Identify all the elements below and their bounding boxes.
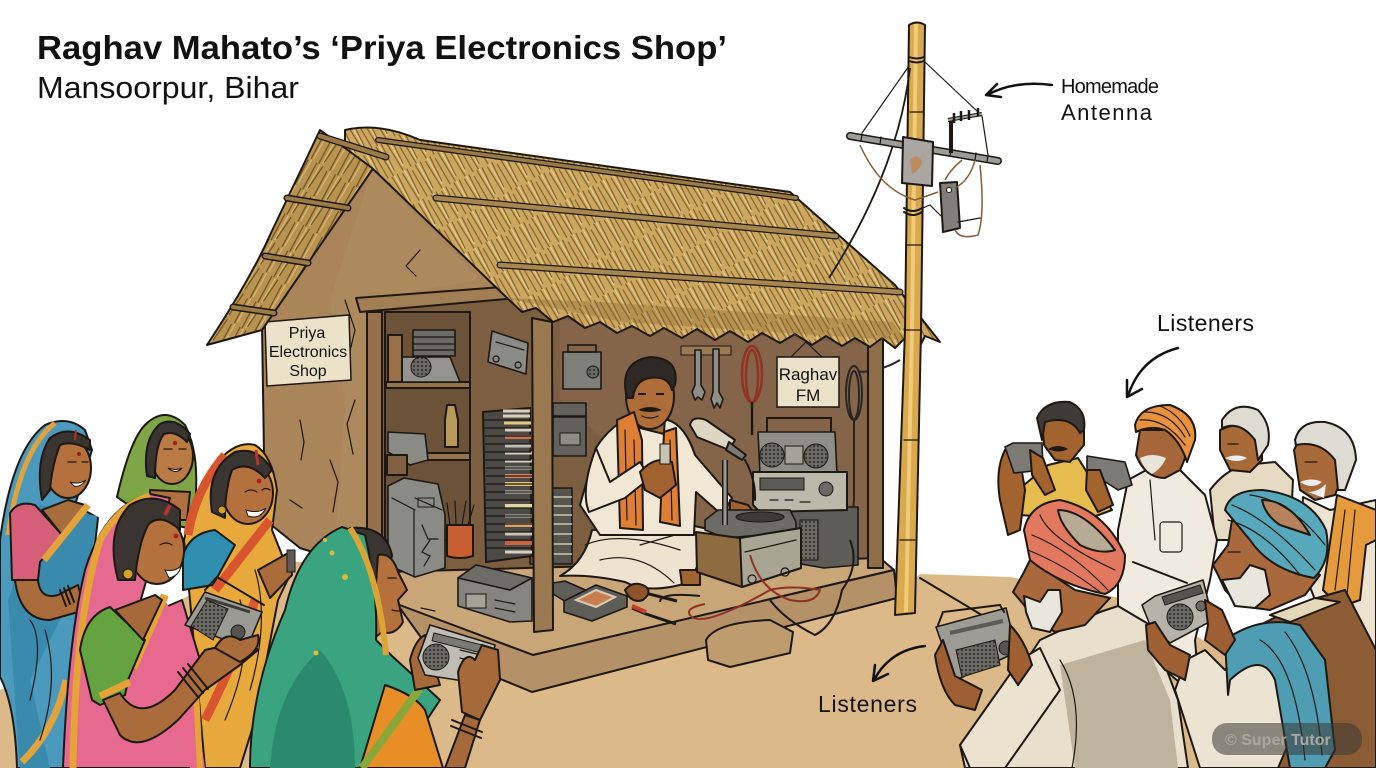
- shelf unit: [385, 312, 470, 540]
- yagi antenna element: [948, 108, 988, 155]
- watermark: [1212, 723, 1362, 755]
- shop sign: Priya Electronics Shop: [265, 315, 351, 386]
- women listeners group: [0, 415, 500, 768]
- face: [372, 555, 407, 640]
- sign: Raghav FM: FM: [796, 386, 820, 405]
- shelf radio: [401, 357, 460, 382]
- main cassette stack: [483, 408, 532, 562]
- hair behind veil: [350, 528, 392, 590]
- men listeners group: [920, 402, 1376, 768]
- face in profile: [1013, 560, 1110, 632]
- front man in blue turban, brown vest: [1133, 490, 1376, 768]
- platform top: [385, 558, 894, 655]
- cassette deck on floor: [458, 565, 532, 622]
- small control box: [940, 182, 960, 232]
- arm with bangles: [103, 640, 258, 742]
- right hand on the deck: [730, 500, 760, 522]
- wooden box amplifier: [696, 528, 801, 587]
- beard: [1024, 590, 1062, 632]
- shop sign: Priya Electronics Shop: Shop: [289, 363, 327, 380]
- label: Homemade Antenna: Homemade: [1061, 76, 1159, 98]
- wall radios: [488, 331, 601, 456]
- dhoti: [560, 525, 735, 588]
- watermark: © Super Tutor: [1225, 732, 1331, 749]
- bamboo pole with homemade antenna: [829, 22, 998, 615]
- floor tools and tapes: [421, 581, 677, 624]
- arrow to men listeners: [1127, 348, 1178, 397]
- label: Homemade Antenna: [1061, 76, 1159, 125]
- roof bamboo battens: [233, 136, 900, 313]
- white sleeve: [1175, 640, 1290, 768]
- radio: [1133, 562, 1213, 643]
- radio equipment stack: [660, 418, 858, 635]
- label: Listeners (upper): Listeners: [1157, 310, 1254, 336]
- pencil cup: [447, 501, 474, 558]
- mud wall: [262, 160, 510, 575]
- junction box: [902, 137, 933, 186]
- front thatch roof: [345, 128, 940, 350]
- man with scarf, far right: [1294, 422, 1376, 690]
- blue shawl: [1225, 622, 1335, 768]
- hanging tools: [681, 346, 731, 408]
- platform front: [397, 570, 897, 692]
- turntable mixer: [705, 510, 796, 538]
- hanging red coil: [742, 346, 762, 435]
- neck and head: [634, 410, 665, 434]
- black cable coil: [846, 360, 900, 522]
- back cassette stack: [530, 488, 572, 564]
- radio: [920, 578, 1017, 680]
- title: Raghav Mahato’s ‘Priya Electronics Shop’: [37, 29, 727, 66]
- woman 3: orange sari: [183, 444, 295, 768]
- face in profile: [1213, 520, 1320, 610]
- front man in coral turban: [920, 500, 1188, 768]
- cables: [689, 555, 820, 619]
- label: Listeners (lower): Listeners: [818, 691, 917, 717]
- arrow to shop floor listeners: [873, 646, 925, 681]
- kurta: [580, 413, 732, 535]
- receiver: [753, 472, 847, 512]
- arrow to antenna: [986, 84, 1052, 97]
- radio: [418, 625, 495, 684]
- speaker box: [778, 507, 858, 568]
- sandy ground: [0, 560, 1240, 768]
- man in orange turban, white kurta: [1118, 405, 1217, 700]
- broken device: [388, 432, 428, 465]
- woman 2: green veil: [117, 415, 197, 530]
- center post: [532, 318, 553, 632]
- sign: Raghav FM: Raghav: [779, 365, 838, 384]
- wall posts: [367, 312, 382, 560]
- subtitle: Mansoorpur, Bihar: [37, 70, 299, 105]
- woman 1: blue sari: [0, 421, 98, 768]
- boombox: [767, 418, 831, 431]
- radio: [185, 577, 264, 648]
- man with grey hair: [1210, 407, 1293, 540]
- shop interior: [370, 292, 880, 580]
- hut: [207, 128, 940, 692]
- loose stone: [706, 620, 793, 667]
- arm holding mic: [586, 448, 650, 512]
- sign: Raghav FM: [777, 342, 839, 407]
- gable thatch: [207, 130, 385, 345]
- jug and bottle: [388, 335, 402, 382]
- cross bar: [850, 136, 998, 161]
- label: Homemade Antenna: Antenna: [1061, 100, 1153, 125]
- guy wires: [862, 62, 978, 133]
- Raghav, the presenter: [560, 357, 760, 601]
- young man in yellow shirt: [998, 402, 1132, 535]
- shop sign: Priya Electronics Shop: Electronics: [269, 344, 347, 361]
- computer tower: [388, 478, 445, 577]
- microphone and stand: [690, 418, 755, 525]
- beard: [1222, 565, 1270, 608]
- woman 4: pink sari: [63, 494, 264, 768]
- shop sign: Priya Electronics Shop: Priya: [289, 325, 325, 342]
- orange scarf: [617, 412, 643, 530]
- shelf stack of tapes: [413, 330, 455, 356]
- woman 5: teal veil: [250, 527, 500, 768]
